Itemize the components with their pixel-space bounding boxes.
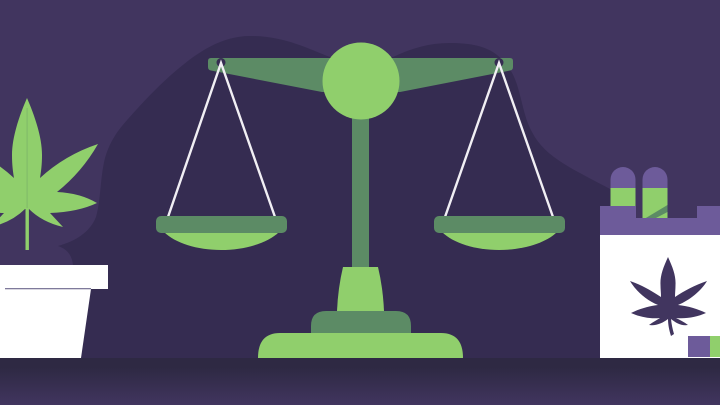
calendar leaf icon — [630, 257, 707, 336]
left strings — [168, 63, 275, 217]
calendar green square — [710, 336, 720, 357]
base bottom tier — [258, 333, 463, 358]
cannabis plant — [0, 98, 98, 250]
post — [352, 110, 369, 270]
floor — [0, 358, 720, 405]
pot rim — [0, 265, 108, 289]
pot body — [0, 289, 91, 358]
calendar — [600, 167, 720, 358]
flower pot — [0, 265, 108, 358]
beam — [208, 58, 513, 92]
centre circle — [322, 42, 400, 120]
left ring — [610, 167, 636, 207]
right bowl — [442, 232, 557, 250]
right pan bar — [434, 216, 565, 233]
base neck — [337, 267, 384, 311]
plant stem — [26, 205, 29, 250]
plant centre vein — [27, 108, 28, 208]
right strings — [445, 63, 553, 217]
right ring — [642, 167, 668, 219]
left pivot — [216, 58, 226, 67]
left bowl — [164, 232, 279, 250]
plant leaves — [0, 98, 98, 227]
right pivot — [494, 58, 504, 67]
pot rim shadow line — [5, 288, 91, 289]
calendar page — [600, 235, 720, 358]
background silhouette — [58, 36, 612, 358]
left pan bar — [156, 216, 287, 233]
balance scale — [156, 42, 565, 358]
calendar purple square — [688, 336, 710, 357]
base middle tier — [311, 311, 411, 333]
calendar header — [600, 206, 720, 235]
